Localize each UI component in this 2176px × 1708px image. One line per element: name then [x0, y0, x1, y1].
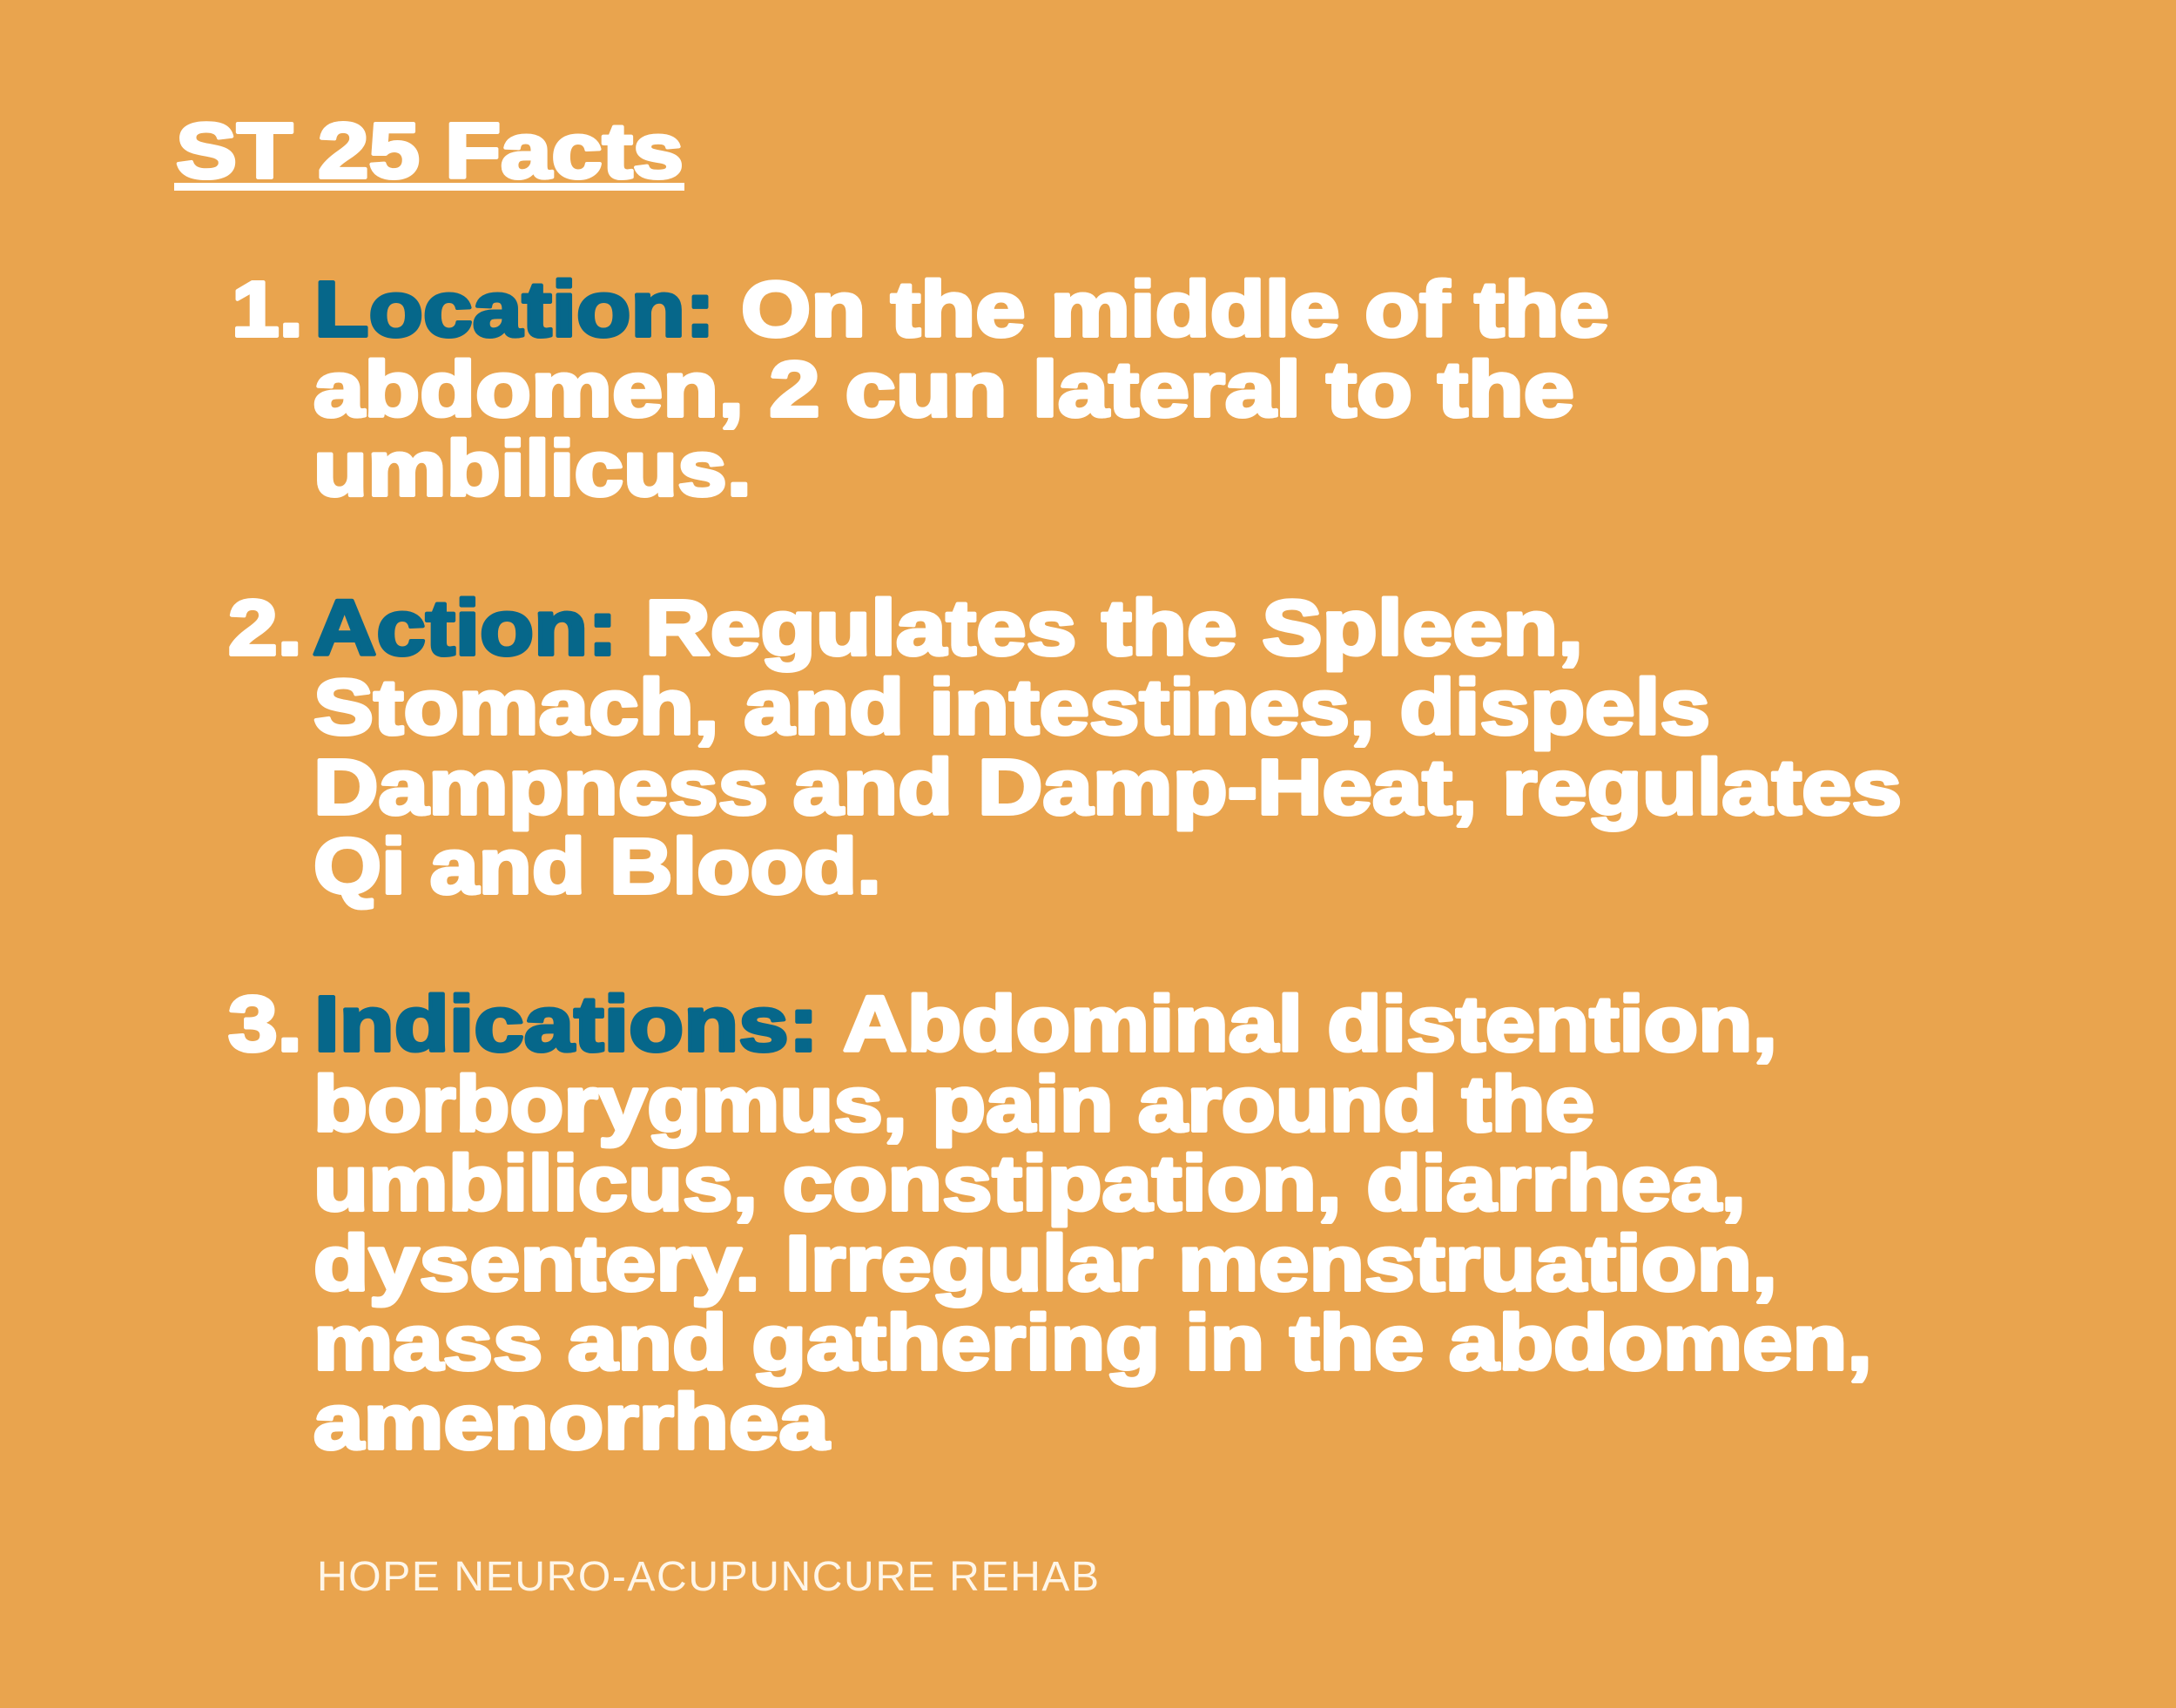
list item 3: indications: umbilicus, constipation, diarrhea, [313, 1140, 1746, 1227]
list item 2: action: Dampness and Damp-Heat, regulates [313, 744, 1902, 831]
list item 1: location: 1. [232, 266, 303, 353]
list item 3: indications: borborygmus, pain around the [313, 1061, 1594, 1148]
list item 3: indications: 3. [228, 981, 302, 1068]
list item 2: action [228, 585, 1902, 911]
list item 2: action: Qi and Blood. [313, 824, 881, 911]
list item 3: indications: Abdominal distention, [843, 981, 1777, 1068]
list item 3: indications: mass and gathering in the abdomen, [313, 1300, 1872, 1387]
list item 1: location: abdomen, 2 cun lateral to the [313, 346, 1574, 434]
list item 3: indications: amenorrhea [313, 1379, 830, 1466]
list item 2: action: Stomach, and intestines, dispels [313, 664, 1710, 751]
list item 2: action: 2. [228, 585, 302, 672]
list item 3: indications: dysentery. Irregular menstruation, [313, 1220, 1777, 1308]
list item 2: action: Regulates the Spleen, [645, 585, 1583, 672]
list item 2: action: Action: [313, 585, 617, 672]
list item 1: location: umbilicus. [313, 426, 751, 513]
list item 1: location [232, 266, 1609, 513]
footer credit: HOPE NEURO-ACUPUNCURE REHAB [317, 1554, 1099, 1600]
list item 1: location: On the middle of the [741, 266, 1609, 353]
list item 3: indications [228, 981, 1872, 1466]
list item 3: indications: Indications: [314, 981, 819, 1068]
title: ST 25 Facts [176, 108, 684, 195]
list item 1: location: Location: [314, 266, 715, 353]
